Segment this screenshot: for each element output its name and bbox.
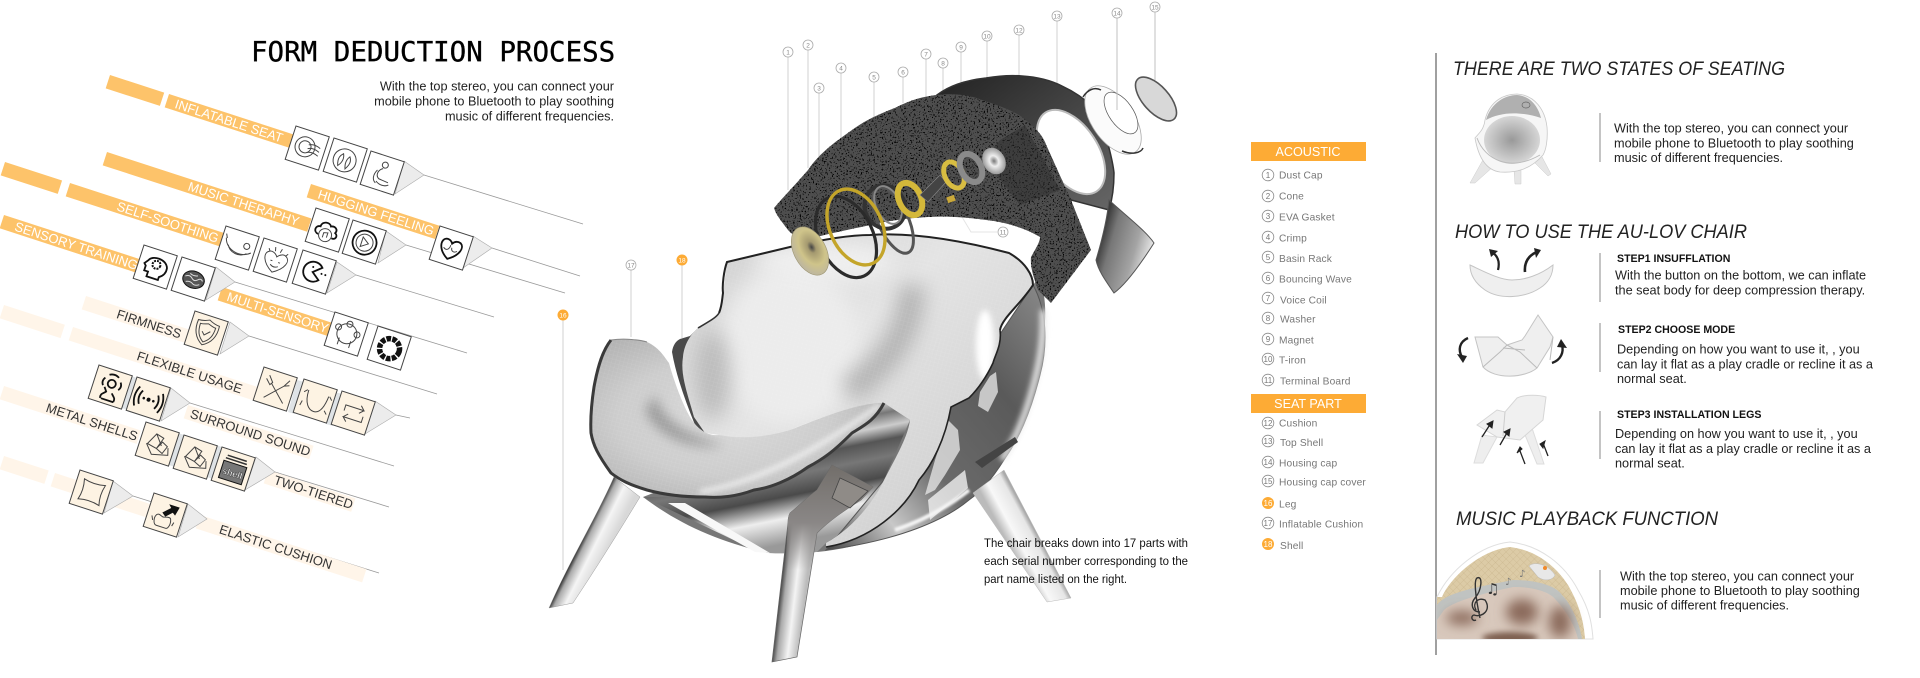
- lower white reflection: [668, 503, 770, 553]
- icon: swap arrows: [331, 391, 375, 435]
- leg: right: [973, 470, 1071, 602]
- icon: head gear: [133, 245, 177, 289]
- gold ring: [816, 180, 896, 274]
- bar: cushion lead: [51, 473, 155, 519]
- bar: firmness: [82, 296, 196, 345]
- leader lines: [133, 175, 583, 573]
- intro text block: mobile phone to Bluetooth to play soothing: [374, 94, 614, 108]
- callout markers: 9: [959, 44, 963, 52]
- icon: hammock: [215, 226, 259, 270]
- bar: surround sound: SURROUND SOUND: [188, 406, 312, 459]
- step 2 text: [1617, 324, 1874, 386]
- acoustic parts list: 3: [1266, 212, 1271, 221]
- music notes: ♪: [1505, 577, 1511, 588]
- icon: play: [342, 220, 386, 264]
- bar: firmness: FIRMNESS: [115, 306, 184, 341]
- callout markers: 14: [1113, 10, 1121, 18]
- foam inner shell: [774, 94, 1091, 303]
- step 1 text: STEP1 INSUFFLATION: [1617, 253, 1730, 265]
- acoustic parts list: 6: [1266, 274, 1271, 283]
- music notes: ♪: [1519, 569, 1525, 580]
- callout markers: 16: [559, 312, 567, 320]
- icon: cloud note: [305, 208, 349, 252]
- divider: [1599, 323, 1601, 372]
- acoustic parts list: 2: [1266, 192, 1271, 201]
- icon: baby: [360, 151, 404, 195]
- panel: exploded chair: [549, 2, 1184, 662]
- acoustic parts list: Bouncing Wave: [1279, 274, 1352, 286]
- intro text block: music of different frequencies.: [445, 110, 614, 124]
- cushion: front bolster: [585, 335, 890, 505]
- step 1 text: the seat body for deep compression therapy.: [1615, 284, 1865, 298]
- bar decor: firmness: [0, 305, 65, 338]
- icon: pac-man: [292, 250, 336, 294]
- bar decor: inflatable seat: [106, 75, 164, 106]
- shell sphere: [643, 275, 1045, 553]
- step 3 text: normal seat.: [1615, 456, 1685, 470]
- divider: [1599, 570, 1601, 618]
- callout markers: 4: [839, 66, 843, 72]
- callout markers: 3: [817, 86, 821, 92]
- basin rack: [858, 179, 922, 259]
- gold washer 2: [939, 158, 969, 192]
- bolster dark rim: [591, 340, 884, 497]
- acoustic parts list: Magnet: [1279, 336, 1314, 346]
- acoustic parts list: [1262, 169, 1352, 388]
- right glass reflection: [826, 285, 1045, 550]
- divider: [1599, 113, 1601, 162]
- icon: tools: [253, 367, 297, 411]
- heading: music playback: MUSIC PLAYBACK FUNCTION: [1456, 509, 1718, 530]
- step 3 text: [1615, 409, 1872, 470]
- t-iron: [977, 143, 1011, 179]
- bar: self-soothing: [66, 183, 224, 247]
- seat parts list: 14: [1264, 458, 1273, 467]
- icon: people ring: [324, 312, 368, 356]
- housing cap cover: [1128, 70, 1184, 128]
- callout markers: 6: [901, 70, 905, 76]
- callout markers: 10: [983, 34, 991, 40]
- acoustic parts list: Basin Rack: [1279, 254, 1333, 265]
- seat parts list: 15: [1264, 477, 1273, 486]
- shadow triangles: [104, 161, 492, 537]
- music dome illustration: [1437, 542, 1593, 644]
- panel: form deduction diagram: [0, 75, 583, 583]
- callout markers: 15: [1151, 4, 1159, 12]
- cushion: back and strip: [680, 230, 1040, 550]
- callout markers: 17: [627, 262, 635, 270]
- icon: heart hug: [429, 226, 473, 270]
- step 3 text: STEP3 INSTALLATION LEGS: [1617, 409, 1761, 421]
- intro text block: With the top stereo, you can connect your: [380, 80, 615, 94]
- seat parts list: Housing cap cover: [1279, 478, 1366, 488]
- voice coil: [920, 175, 946, 202]
- seat parts list: [1262, 417, 1366, 552]
- acoustic parts list: 8: [1266, 314, 1271, 323]
- under-seat glass: [643, 403, 910, 553]
- icon: metal ingots 2: [173, 435, 217, 479]
- chair caption: [984, 536, 1188, 586]
- seating text: With the top stereo, you can connect your: [1614, 122, 1849, 136]
- step 2 text: Depending on how you want to use it, , you: [1617, 342, 1860, 356]
- acoustic parts list: 1: [1266, 171, 1271, 180]
- icon: bead ring: [367, 326, 411, 370]
- seat parts list: Top Shell: [1280, 438, 1323, 449]
- icon: pillow: [69, 470, 113, 514]
- icon: cradle: [293, 379, 337, 423]
- bar: flexible usage: [69, 327, 259, 401]
- legend header: acoustic: [1251, 142, 1366, 161]
- divider: [1599, 253, 1601, 302]
- top shell: [937, 76, 1154, 293]
- seat parts list: 12: [1264, 419, 1273, 428]
- callout markers: 5: [872, 74, 876, 82]
- bar: multi-sensory: MULTI-SENSORY: [225, 289, 331, 336]
- speaker exploded parts: [784, 143, 1011, 287]
- icon: step 1 cushion: [1470, 248, 1553, 297]
- step 2 text: can lay it flat as a play cradle or recline it as a: [1617, 358, 1874, 372]
- acoustic parts list: Washer: [1280, 314, 1316, 326]
- bar: elastic cushion: ELASTIC CUSHION: [217, 522, 334, 572]
- acoustic parts list: Crimp: [1279, 234, 1307, 244]
- legend header: acoustic: ACOUSTIC: [1275, 145, 1341, 159]
- acoustic parts list: 7: [1266, 294, 1271, 303]
- vertical panel rule: [1435, 53, 1437, 655]
- acoustic parts list: EVA Gasket: [1279, 212, 1335, 224]
- acoustic parts list: Terminal Board: [1280, 376, 1351, 388]
- seat parts list: Housing cap: [1279, 458, 1337, 470]
- gold washer: [893, 179, 927, 219]
- icon: shell label: [211, 447, 255, 491]
- icon: brain: [171, 257, 215, 301]
- callout markers: [558, 2, 1160, 320]
- bar: sensory training: SENSORY TRAINING: [13, 219, 140, 273]
- seat parts list: Shell: [1280, 541, 1303, 552]
- callout markers: 1: [786, 50, 790, 56]
- icon: person with signal: [88, 365, 132, 409]
- bar: inflatable seat: INFLATABLE SEAT: [173, 96, 285, 145]
- callout markers: 12: [1015, 28, 1023, 34]
- seat parts list: 18: [1264, 540, 1273, 549]
- acoustic parts list: 11: [1264, 376, 1273, 385]
- legend header: seat part: SEAT PART: [1274, 397, 1342, 411]
- bar: music theraphy: [103, 152, 312, 232]
- icon: heart face: [253, 238, 297, 282]
- chair caption: each serial number corresponding to the: [984, 554, 1188, 568]
- bar: flexible usage: FLEXIBLE USAGE: [135, 348, 244, 396]
- terminal board: [946, 195, 956, 203]
- icon: chair thumbnail: [1470, 94, 1551, 184]
- seat parts list: 17: [1264, 519, 1273, 528]
- seat parts list: 13: [1264, 437, 1273, 446]
- magnet: [955, 150, 987, 186]
- acoustic parts list: 10: [1264, 355, 1273, 364]
- bar: metal shells: METAL SHELLS: [44, 400, 140, 444]
- icon: step 2 modes: [1457, 315, 1567, 376]
- bar: metal shells: [0, 386, 141, 444]
- callout markers: 2: [806, 42, 810, 50]
- icon: shell label: shell: [221, 466, 244, 481]
- acoustic parts list: 4: [1266, 233, 1271, 242]
- panel: parts legend: [1251, 142, 1366, 552]
- bar: self-soothing: SELF-SOOTHING: [115, 199, 221, 246]
- heading: two states: THERE ARE TWO STATES OF SEATING: [1453, 59, 1785, 80]
- seating text: mobile phone to Bluetooth to play soothing: [1614, 136, 1854, 150]
- seat parts list: Leg: [1279, 500, 1297, 510]
- callout markers: 11: [1000, 230, 1007, 236]
- callout markers: 7: [924, 52, 928, 58]
- icon: step 3 legs: [1474, 395, 1548, 464]
- bar: music theraphy: MUSIC THERAPHY: [186, 179, 302, 229]
- bar decor: cushion: [0, 456, 49, 484]
- bar: hugging feeling: HUGGING FEELING: [316, 187, 436, 238]
- bar: elastic cushion: [196, 515, 367, 583]
- step 2 text: STEP2 CHOOSE MODE: [1618, 324, 1735, 336]
- leg: front: [772, 465, 873, 662]
- icon: treble clef: [1472, 578, 1487, 620]
- acoustic parts list: Cone: [1279, 192, 1304, 202]
- music notes: ♫: [1486, 580, 1499, 598]
- callout lines: [563, 21, 1057, 570]
- seat parts list: Inflatable Cushion: [1279, 520, 1363, 530]
- acoustic parts list: Dust Cap: [1279, 170, 1323, 182]
- step 3 text: can lay it flat as a play cradle or recline it as a: [1615, 442, 1872, 456]
- black ring: [803, 187, 889, 287]
- bar: two-tiered: TWO-TIERED: [272, 472, 355, 512]
- step 2 text: normal seat.: [1617, 372, 1687, 386]
- callout markers: 13: [1053, 14, 1061, 20]
- icon: leaves in circle: [323, 138, 367, 182]
- music text: With the top stereo, you can connect your: [1620, 570, 1855, 584]
- step 3 text: Depending on how you want to use it, , you: [1615, 427, 1858, 441]
- leg clip: right: [975, 437, 1018, 468]
- callout markers: 8: [941, 60, 945, 68]
- step 1 text: [1615, 253, 1866, 298]
- acoustic parts list: 5: [1266, 253, 1271, 262]
- music text: music of different frequencies.: [1620, 598, 1789, 612]
- bar decor: self-soothing: [1, 162, 62, 194]
- title: FORM DEDUCTION PROCESS: [251, 36, 615, 68]
- icon: press cushion: [143, 493, 187, 537]
- chair caption: The chair breaks down into 17 parts with: [984, 536, 1188, 550]
- icon: shield: [184, 311, 228, 355]
- callout markers: 18: [678, 258, 686, 264]
- shell edge behind back cushion: [672, 326, 706, 434]
- housing cap: [1073, 13, 1153, 164]
- icon: inflate rings: [285, 126, 329, 170]
- panel: how it works: [1437, 59, 1874, 644]
- heading: how to use: HOW TO USE THE AU-LOV CHAIR: [1455, 222, 1747, 243]
- connector strips between cream icons: [122, 376, 342, 479]
- cushion rim: [719, 234, 1033, 330]
- music text: mobile phone to Bluetooth to play soothing: [1620, 584, 1860, 598]
- icon: surround waves: [126, 377, 170, 421]
- icon: metal ingots: [135, 422, 179, 466]
- seating text: music of different frequencies.: [1614, 151, 1783, 165]
- chair caption: part name listed on the right.: [984, 572, 1127, 586]
- seat parts list: Cushion: [1279, 418, 1317, 430]
- legend header: seat part: [1251, 394, 1366, 413]
- acoustic parts list: 9: [1266, 335, 1271, 344]
- dust cap: [784, 221, 836, 281]
- seat parts list: 16: [1264, 499, 1273, 508]
- leg: left: [549, 477, 640, 608]
- acoustic parts list: Voice Coil: [1280, 296, 1327, 306]
- acoustic parts list: T-iron: [1279, 356, 1306, 366]
- step 1 text: With the button on the bottom, we can inflate: [1615, 268, 1866, 282]
- divider: [1599, 411, 1601, 459]
